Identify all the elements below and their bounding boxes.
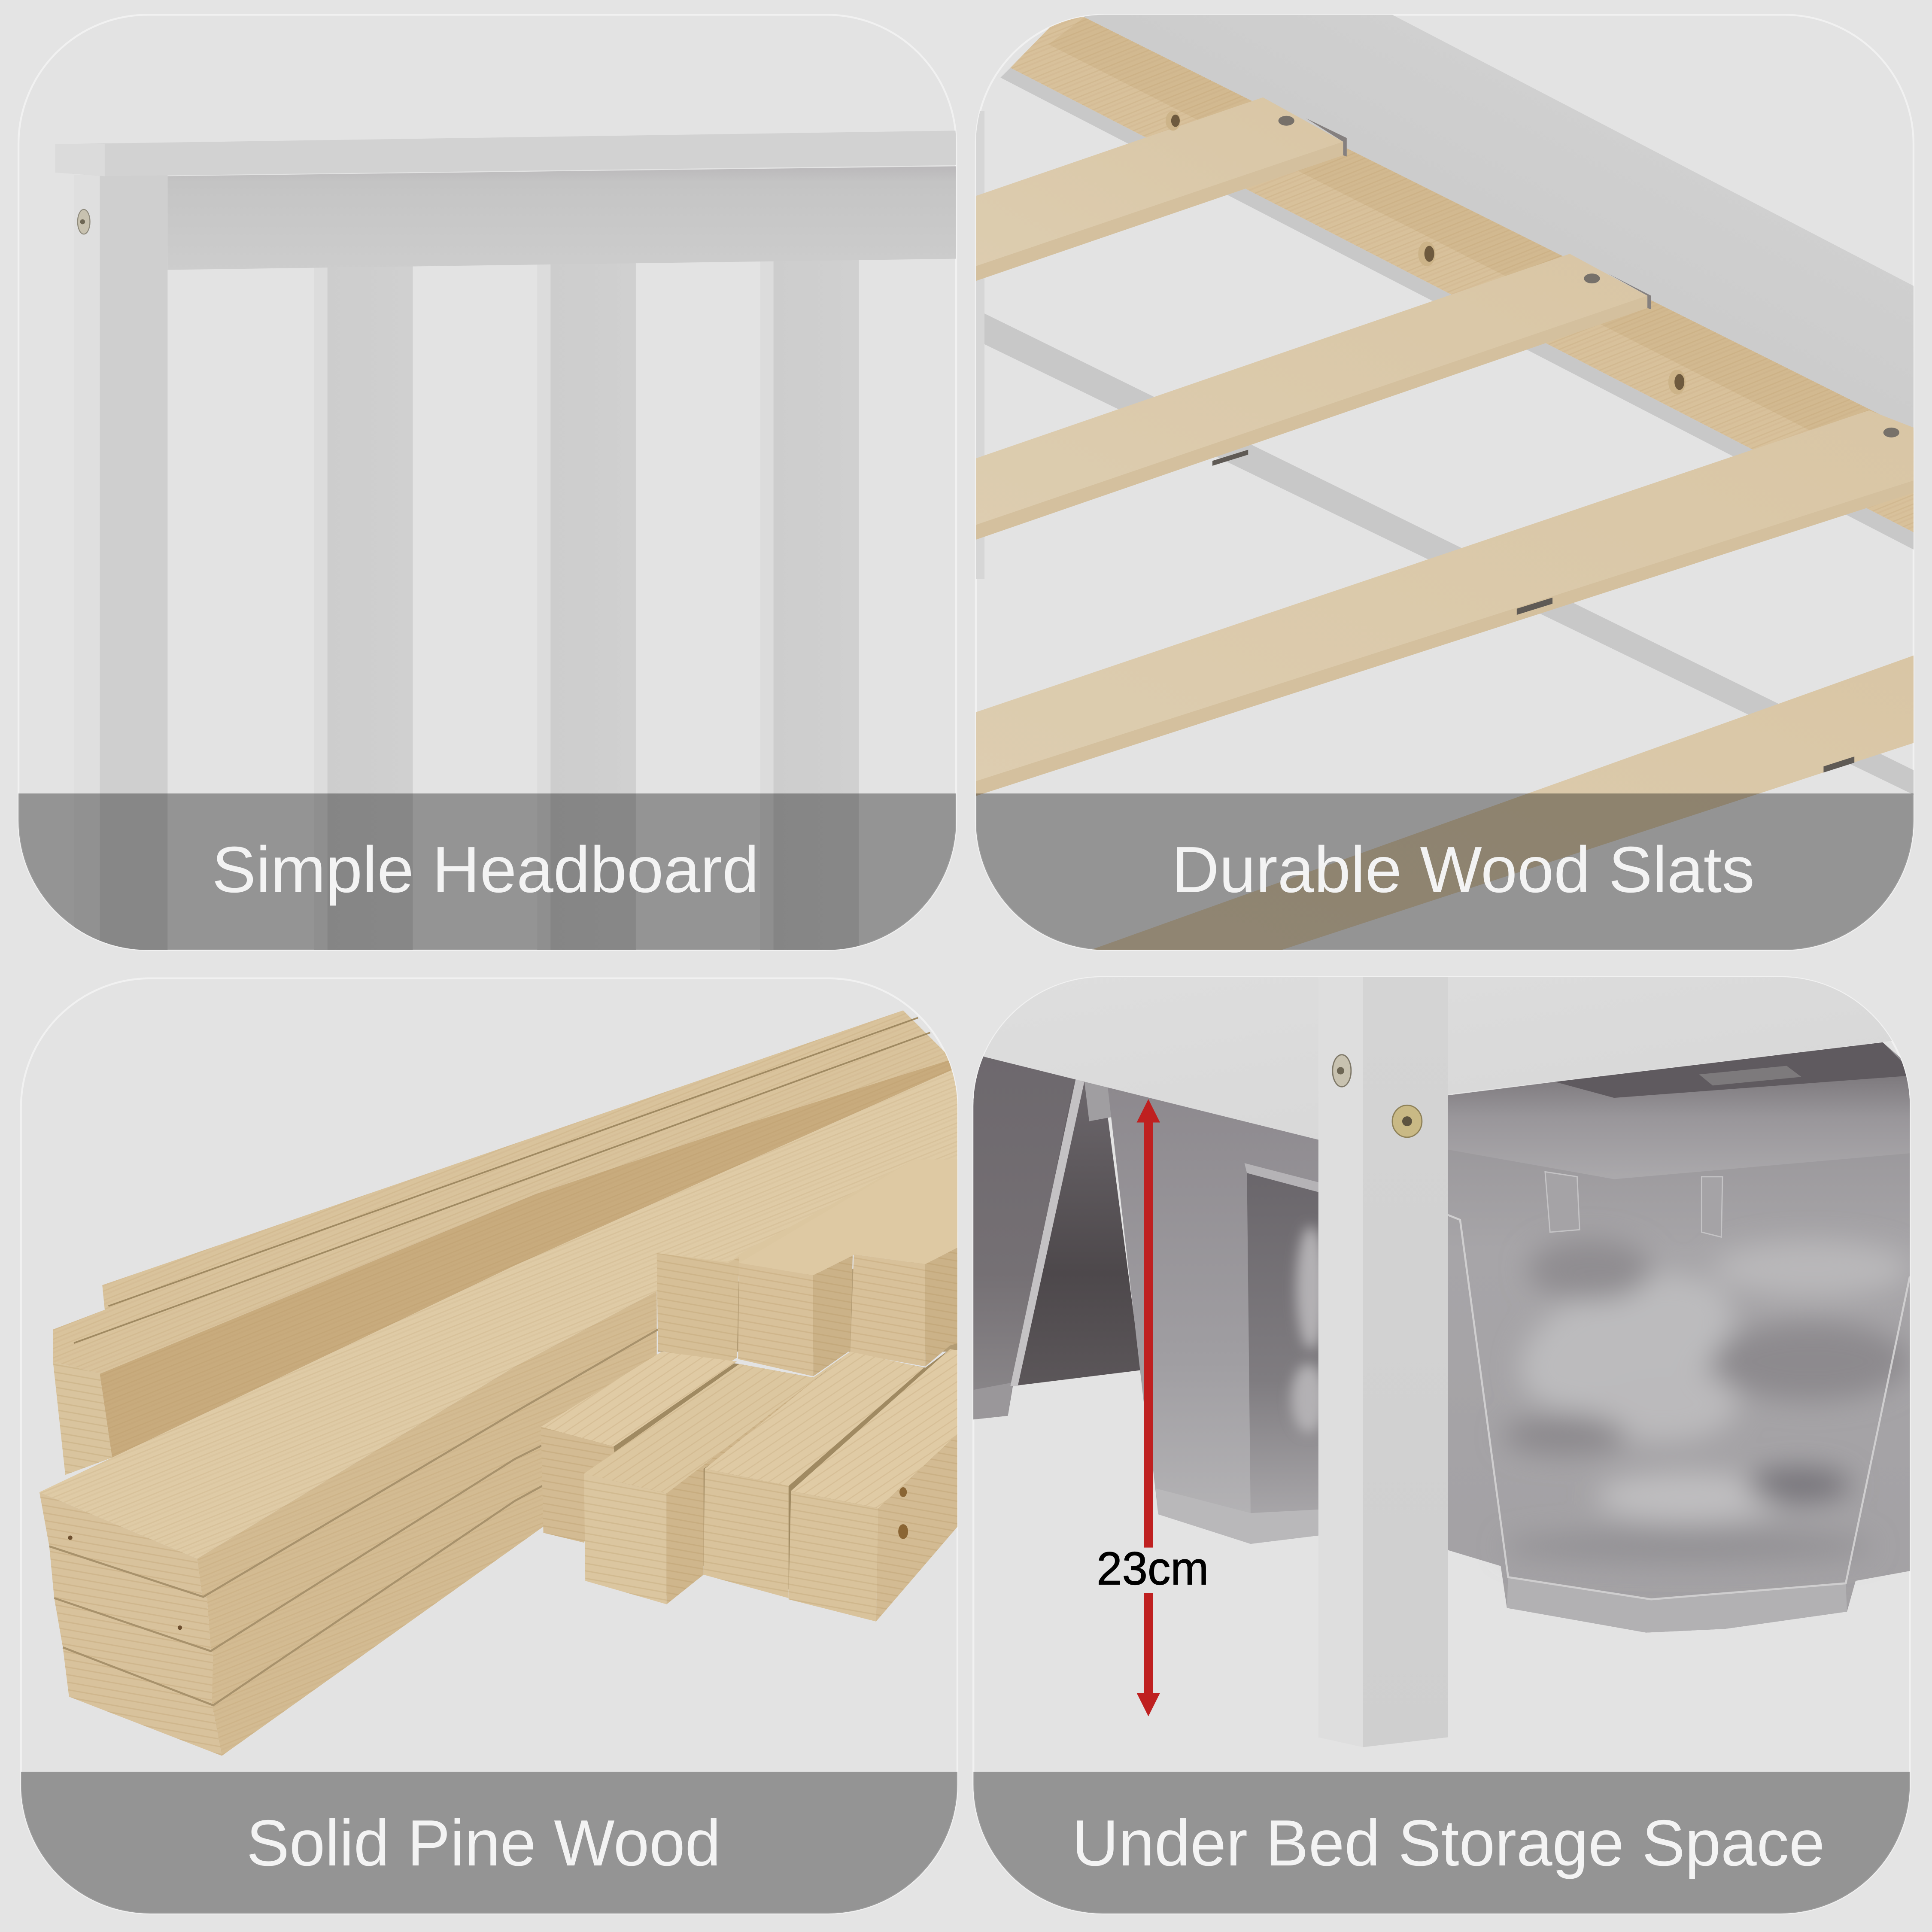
icon: bolt xyxy=(78,210,90,234)
bed frame and leg xyxy=(973,977,1910,1747)
icons: bolts xyxy=(1333,1055,1422,1137)
panel: durable wood slats xyxy=(976,15,1914,950)
caption: Solid Pine Wood xyxy=(246,1807,721,1880)
arrow: 23cm height xyxy=(1087,1099,1218,1716)
caption: Simple Headboard xyxy=(212,833,759,906)
lower square blocks xyxy=(541,1349,959,1622)
headboard frame illustration xyxy=(55,131,956,951)
caption: Under Bed Storage Space xyxy=(1072,1807,1825,1880)
caption band xyxy=(973,1772,1910,1914)
storage boxes illustration xyxy=(973,1042,1910,1633)
caption band xyxy=(21,1772,957,1914)
caption band xyxy=(976,793,1914,950)
lumber stack illustration xyxy=(39,1010,959,1756)
panel: solid pine wood xyxy=(21,978,959,1914)
caption band xyxy=(18,793,956,950)
panel: under bed storage space xyxy=(973,977,1910,1914)
height label: 23cm xyxy=(1097,1543,1209,1595)
panel: simple headboard xyxy=(18,15,956,951)
upper square blocks xyxy=(657,1160,959,1376)
caption: Durable Wood Slats xyxy=(1172,833,1755,906)
icons: screws and holes xyxy=(1166,111,1899,437)
bed frame and slats illustration xyxy=(976,15,1914,950)
